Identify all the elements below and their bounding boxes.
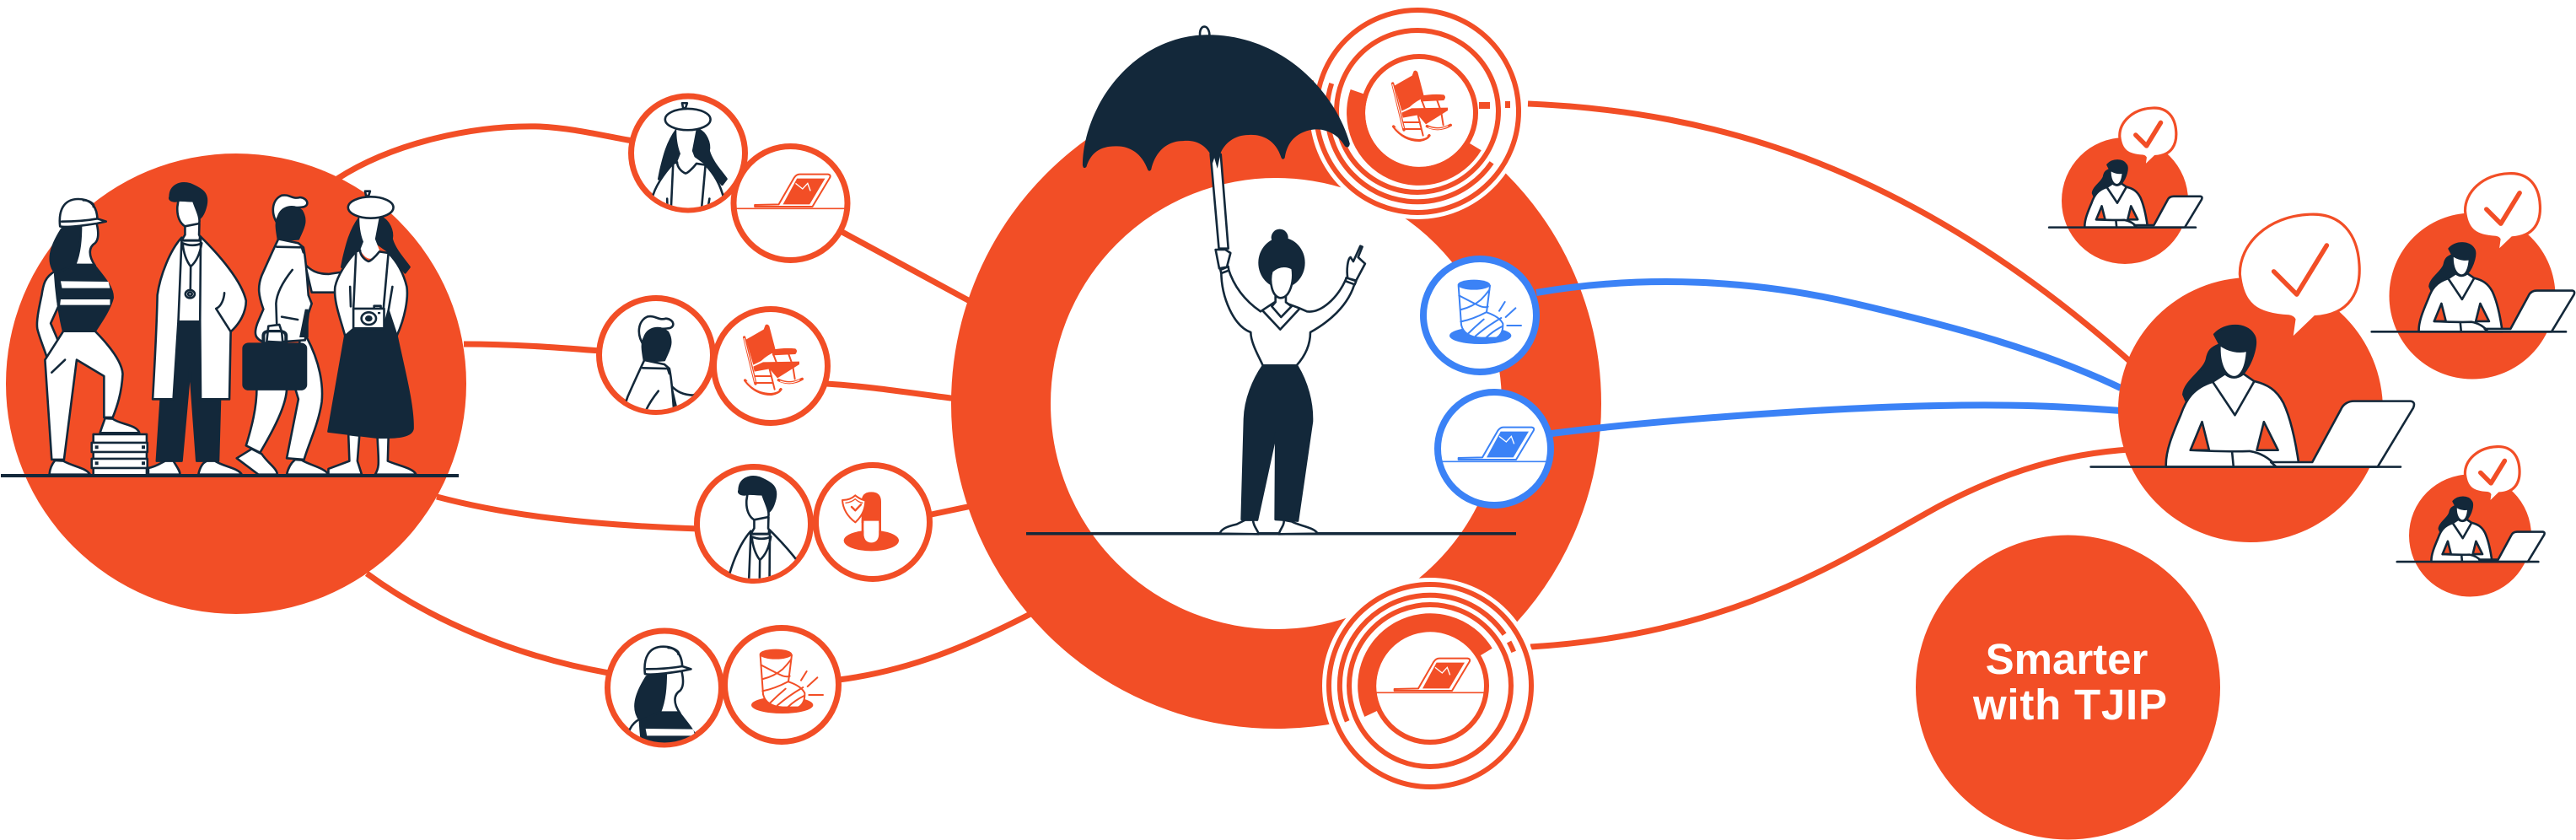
connector: chair risk to center ring bbox=[826, 384, 957, 399]
circle: advisor background, right bbox=[2390, 213, 2555, 380]
group: four people standing bbox=[37, 183, 416, 475]
connector: blue laptop to main advisor bbox=[1552, 405, 2121, 433]
risk circle: pill and shield bbox=[816, 466, 929, 579]
connector: cast risk to center ring bbox=[839, 614, 1030, 680]
connector: bottom ring to main advisor bbox=[1530, 450, 2129, 647]
connector: top ring to main advisor bbox=[1528, 104, 2133, 364]
person circle: doctor bbox=[694, 464, 814, 584]
connector: blue cast to main advisor bbox=[1536, 282, 2121, 388]
person: advisor top left bbox=[2049, 108, 2202, 228]
blue circle: leg cast bbox=[1423, 259, 1536, 372]
concentric rings: laptop bbox=[1322, 578, 1538, 794]
connector: crowd to doctor bbox=[437, 497, 700, 529]
panel: central orange ring bbox=[1001, 128, 1552, 679]
person: main advisor at laptop with speech bubble bbox=[2091, 214, 2414, 467]
risk circle: rocking chair bbox=[713, 309, 828, 423]
concentric rings: rocking chair bbox=[1310, 3, 1525, 219]
circle: advisor background, main bbox=[2118, 277, 2383, 542]
risk circle: laptop bbox=[734, 147, 847, 260]
person: advisor right bbox=[2372, 174, 2574, 331]
umbrella bbox=[1083, 27, 1350, 249]
ground line: center figure bbox=[1026, 532, 1516, 535]
risk circle: leg cast bbox=[725, 627, 838, 742]
connector: crowd to hard hat worker bbox=[367, 573, 609, 673]
connector: laptop risk to center ring bbox=[839, 230, 970, 301]
circle: advisor background, bottom right bbox=[2409, 474, 2531, 597]
connector: crowd to business person bbox=[464, 344, 600, 351]
subtitle: with TJIP bbox=[1972, 681, 2167, 729]
circle: Smarter with TJIP badge bbox=[1916, 535, 2220, 840]
person: business person with briefcase bbox=[237, 195, 341, 475]
person: advisor bottom right bbox=[2397, 447, 2545, 562]
connector: crowd to beret person bbox=[337, 127, 632, 179]
ground line: crowd bbox=[1, 474, 459, 477]
connector: pill risk to center ring bbox=[923, 506, 971, 516]
circle: crowd background bbox=[6, 153, 466, 614]
person circle: business person bbox=[596, 295, 715, 415]
person circle: beret bbox=[628, 93, 748, 213]
person circle: hard hat worker bbox=[605, 627, 723, 747]
title: Smarter bbox=[1986, 635, 2148, 683]
blue circle: laptop bbox=[1438, 392, 1551, 505]
circle: advisor background, top left bbox=[2062, 137, 2188, 264]
person: hard hat worker bbox=[37, 199, 148, 475]
person: tourist with beret and camera bbox=[328, 191, 416, 475]
person: woman with raised arms bbox=[1216, 229, 1365, 534]
person: doctor bbox=[148, 183, 246, 475]
